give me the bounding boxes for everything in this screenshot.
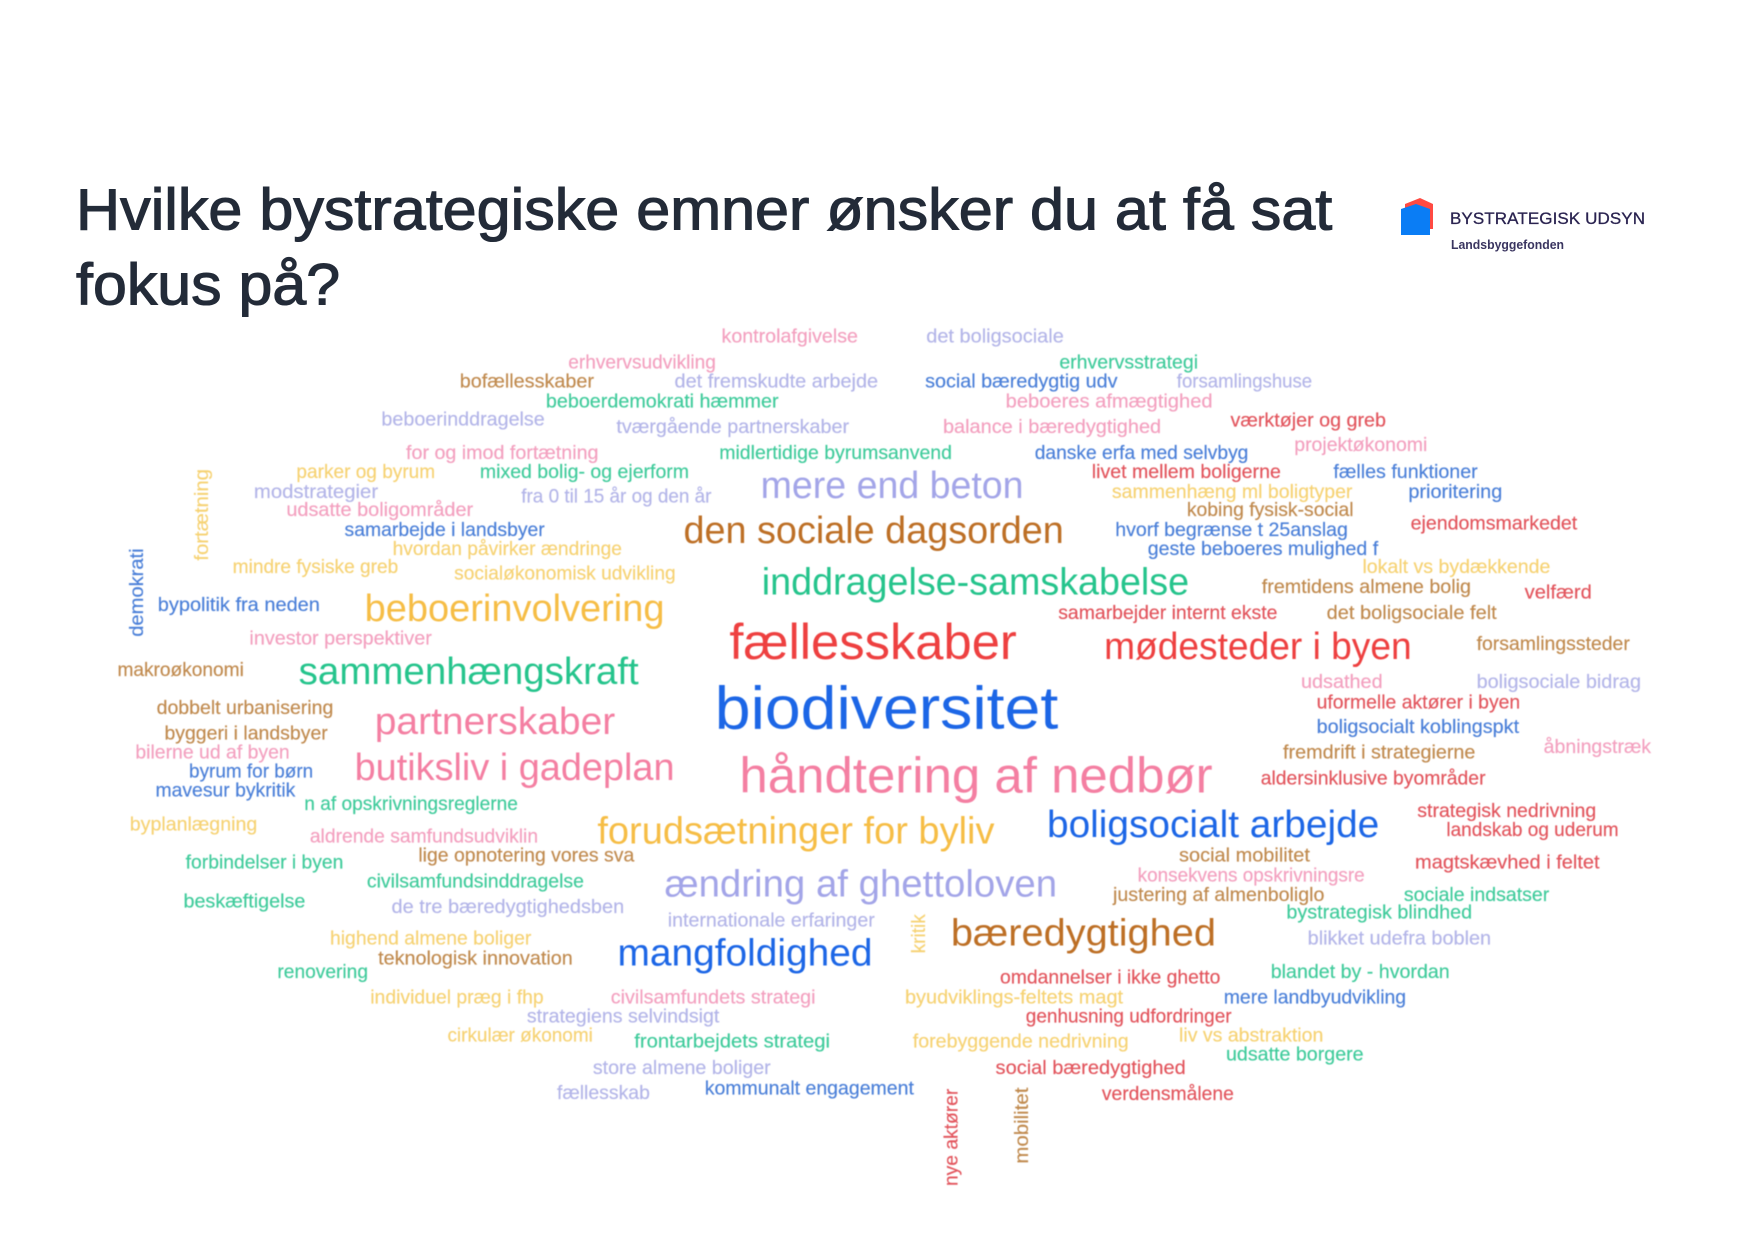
word: mobilitet (vertical): mobilitet — [1012, 1087, 1033, 1164]
word: ændring af ghettoloven: ændring af ghettoloven — [664, 863, 1057, 905]
word: fællesskaber: fællesskaber — [729, 613, 1017, 670]
word: inddragelse-samskabelse: inddragelse-samskabelse — [762, 561, 1189, 603]
title: Hvilke bystrategiske emner ønsker du at få sat — [76, 178, 1332, 243]
word: biodiversitet: biodiversitet — [715, 674, 1058, 742]
word: justering af almenboliglo: justering af almenboliglo — [1112, 885, 1324, 906]
word: dobbelt urbanisering: dobbelt urbanisering — [157, 698, 333, 719]
word: mavesur bykritik: mavesur bykritik — [155, 781, 296, 802]
word: store almene boliger: store almene boliger — [593, 1058, 771, 1079]
word: hvorf begrænse t 25anslag: hvorf begrænse t 25anslag — [1115, 520, 1348, 541]
word: individuel præg i fhp: individuel præg i fhp — [370, 988, 544, 1009]
word: forsamlingshuse: forsamlingshuse — [1177, 371, 1312, 392]
word: mindre fysiske greb: mindre fysiske greb — [233, 557, 398, 578]
word: internationale erfaringer: internationale erfaringer — [668, 911, 875, 932]
word: bilerne ud af byen: bilerne ud af byen — [135, 743, 290, 764]
word: velfærd: velfærd — [1525, 583, 1592, 604]
word: lokalt vs bydækkende: lokalt vs bydækkende — [1362, 557, 1550, 578]
word: beboerinddragelse: beboerinddragelse — [381, 409, 545, 430]
word: makroøkonomi: makroøkonomi — [117, 660, 244, 681]
word: forudsætninger for byliv: forudsætninger for byliv — [597, 811, 994, 853]
word: udsathed: udsathed — [1301, 672, 1383, 693]
word: civilsamfundets strategi: civilsamfundets strategi — [611, 988, 815, 1009]
word: de tre bæredygtighedsben: de tre bæredygtighedsben — [392, 897, 624, 918]
word: cirkulær økonomi: cirkulær økonomi — [447, 1026, 593, 1047]
word: balance i bæredygtighed: balance i bæredygtighed — [943, 417, 1161, 438]
word: projektøkonomi: projektøkonomi — [1294, 435, 1427, 456]
word: highend almene boliger: highend almene boliger — [330, 928, 532, 949]
word: beboeres afmægtighed: beboeres afmægtighed — [1006, 391, 1213, 412]
word: værktøjer og greb: værktøjer og greb — [1230, 410, 1386, 431]
word: livet mellem boligerne: livet mellem boligerne — [1092, 462, 1281, 483]
word: mødesteder i byen: mødesteder i byen — [1104, 626, 1412, 668]
word: n af opskrivningsreglerne: n af opskrivningsreglerne — [304, 794, 518, 815]
word: bæredygtighed: bæredygtighed — [951, 913, 1216, 955]
word: aldersinklusive byområder: aldersinklusive byområder — [1261, 768, 1486, 789]
word: butiksliv i gadeplan: butiksliv i gadeplan — [355, 747, 675, 789]
word: genhusning udfordringer: genhusning udfordringer — [1026, 1007, 1232, 1028]
word: fremdrift i strategierne: fremdrift i strategierne — [1283, 743, 1475, 764]
word: boligsocialt koblingspkt: boligsocialt koblingspkt — [1317, 717, 1520, 738]
word: lige opnotering vores sva: lige opnotering vores sva — [418, 846, 635, 867]
word: sociale indsatser: sociale indsatser — [1404, 885, 1550, 906]
word: beboerdemokrati hæmmer: beboerdemokrati hæmmer — [546, 391, 779, 412]
logo: Bystrategisk Udsyn: BYSTRATEGISK UDSYN — [1450, 209, 1645, 228]
word: sammenhæng ml boligtyper: sammenhæng ml boligtyper — [1112, 482, 1353, 503]
word: mere end beton: mere end beton — [761, 465, 1024, 507]
word: social bæredygtighed: social bæredygtighed — [996, 1058, 1186, 1079]
word: fra 0 til 15 år og den år: fra 0 til 15 år og den år — [521, 487, 712, 508]
word: kritik (vertical): kritik — [909, 914, 930, 953]
word: civilsamfundsinddragelse: civilsamfundsinddragelse — [367, 871, 584, 892]
word: byrum for børn: byrum for børn — [189, 762, 313, 783]
word: fremtidens almene bolig: fremtidens almene bolig — [1262, 577, 1471, 598]
word: ejendomsmarkedet: ejendomsmarkedet — [1411, 513, 1578, 534]
word: den sociale dagsorden: den sociale dagsorden — [683, 510, 1064, 552]
word: det boligsociale: det boligsociale — [926, 327, 1064, 348]
word: modstrategier: modstrategier — [254, 482, 379, 503]
word: hvordan påvirker ændringe: hvordan påvirker ændringe — [393, 539, 622, 560]
word: forebyggende nedrivning: forebyggende nedrivning — [913, 1031, 1129, 1052]
word: udsatte boligområder: udsatte boligområder — [286, 500, 474, 521]
word: strategiens selvindsigt: strategiens selvindsigt — [527, 1007, 720, 1028]
word: fortætning (vertical): fortætning — [192, 469, 213, 561]
word: bystrategisk blindhed: bystrategisk blindhed — [1286, 903, 1472, 924]
word: uformelle aktører i byen: uformelle aktører i byen — [1317, 692, 1520, 713]
word: socialøkonomisk udvikling: socialøkonomisk udvikling — [454, 564, 676, 585]
word: erhvervsstrategi: erhvervsstrategi — [1059, 352, 1198, 373]
word: sammenhængskraft: sammenhængskraft — [299, 651, 639, 693]
word: udsatte borgere: udsatte borgere — [1226, 1045, 1364, 1066]
word: bofællesskaber: bofællesskaber — [460, 371, 595, 392]
word: strategisk nedrivning: strategisk nedrivning — [1417, 801, 1596, 822]
logo: Bystrategisk Udsyn: Landsbyggefonden — [1451, 237, 1564, 252]
word: kontrolafgivelse: kontrolafgivelse — [722, 327, 858, 348]
word: fælles funktioner: fælles funktioner — [1333, 462, 1478, 483]
word: blandet by - hvordan: blandet by - hvordan — [1271, 962, 1450, 983]
word: mixed bolig- og ejerform: mixed bolig- og ejerform — [480, 462, 689, 483]
word: renovering: renovering — [277, 962, 368, 983]
word: erhvervsudvikling: erhvervsudvikling — [568, 352, 716, 373]
word: samarbejde i landsbyer: samarbejde i landsbyer — [345, 520, 545, 541]
word: byplanlægning: byplanlægning — [130, 814, 257, 835]
word: prioritering: prioritering — [1408, 482, 1502, 503]
word: omdannelser i ikke ghetto: omdannelser i ikke ghetto — [1000, 968, 1220, 989]
word: mangfoldighed: mangfoldighed — [617, 933, 873, 975]
word: byudviklings-feltets magt: byudviklings-feltets magt — [905, 988, 1124, 1009]
word: midlertidige byrumsanvend: midlertidige byrumsanvend — [719, 443, 952, 464]
word: nye aktører (vertical): nye aktører — [942, 1088, 963, 1186]
word: geste beboeres mulighed f: geste beboeres mulighed f — [1148, 539, 1379, 560]
word: magtskævhed i feltet: magtskævhed i feltet — [1415, 852, 1600, 873]
word: beskæftigelse: beskæftigelse — [183, 891, 305, 912]
word: for og imod fortætning: for og imod fortætning — [406, 443, 598, 464]
word: landskab og uderum: landskab og uderum — [1446, 820, 1619, 841]
word: danske erfa med selvbyg: danske erfa med selvbyg — [1035, 443, 1248, 464]
word: det fremskudte arbejde: det fremskudte arbejde — [675, 371, 878, 392]
word: boligsociale bidrag: boligsociale bidrag — [1477, 672, 1641, 693]
word: håndtering af nedbør: håndtering af nedbør — [739, 746, 1213, 803]
word: liv vs abstraktion: liv vs abstraktion — [1179, 1026, 1323, 1047]
word: byggeri i landsbyer: byggeri i landsbyer — [164, 724, 328, 745]
word: mere landbyudvikling: mere landbyudvikling — [1224, 988, 1406, 1009]
word: det boligsociale felt: det boligsociale felt — [1327, 603, 1497, 624]
word: bypolitik fra neden: bypolitik fra neden — [158, 595, 320, 616]
word: kommunalt engagement: kommunalt engagement — [705, 1078, 915, 1099]
word: konsekvens opskrivningsre: konsekvens opskrivningsre — [1138, 866, 1365, 887]
title: fokus på? — [76, 253, 340, 318]
word: aldrende samfundsudviklin: aldrende samfundsudviklin — [310, 827, 538, 848]
word: fællesskab: fællesskab — [557, 1083, 650, 1104]
word: åbningstræk: åbningstræk — [1544, 737, 1652, 758]
word: parker og byrum: parker og byrum — [296, 462, 435, 483]
word: samarbejder internt ekste: samarbejder internt ekste — [1058, 603, 1277, 624]
word: investor perspektiver: investor perspektiver — [249, 629, 432, 650]
word: social mobilitet: social mobilitet — [1179, 846, 1311, 867]
word: demokrati (vertical): demokrati — [127, 548, 148, 637]
word: social bæredygtig udv: social bæredygtig udv — [925, 371, 1118, 392]
word: forsamlingssteder: forsamlingssteder — [1477, 634, 1631, 655]
word: blikket udefra boblen: blikket udefra boblen — [1308, 928, 1491, 949]
word: partnerskaber: partnerskaber — [375, 701, 616, 743]
word: teknologisk innovation: teknologisk innovation — [378, 949, 573, 970]
word: tværgående partnerskaber: tværgående partnerskaber — [616, 417, 850, 438]
word: beboerinvolvering: beboerinvolvering — [365, 588, 664, 630]
word: boligsocialt arbejde: boligsocialt arbejde — [1047, 804, 1379, 846]
word: verdensmålene: verdensmålene — [1102, 1084, 1234, 1105]
word: forbindelser i byen: forbindelser i byen — [186, 852, 343, 873]
word: kobing fysisk-social: kobing fysisk-social — [1187, 500, 1354, 521]
word: frontarbejdets strategi: frontarbejdets strategi — [634, 1031, 830, 1052]
